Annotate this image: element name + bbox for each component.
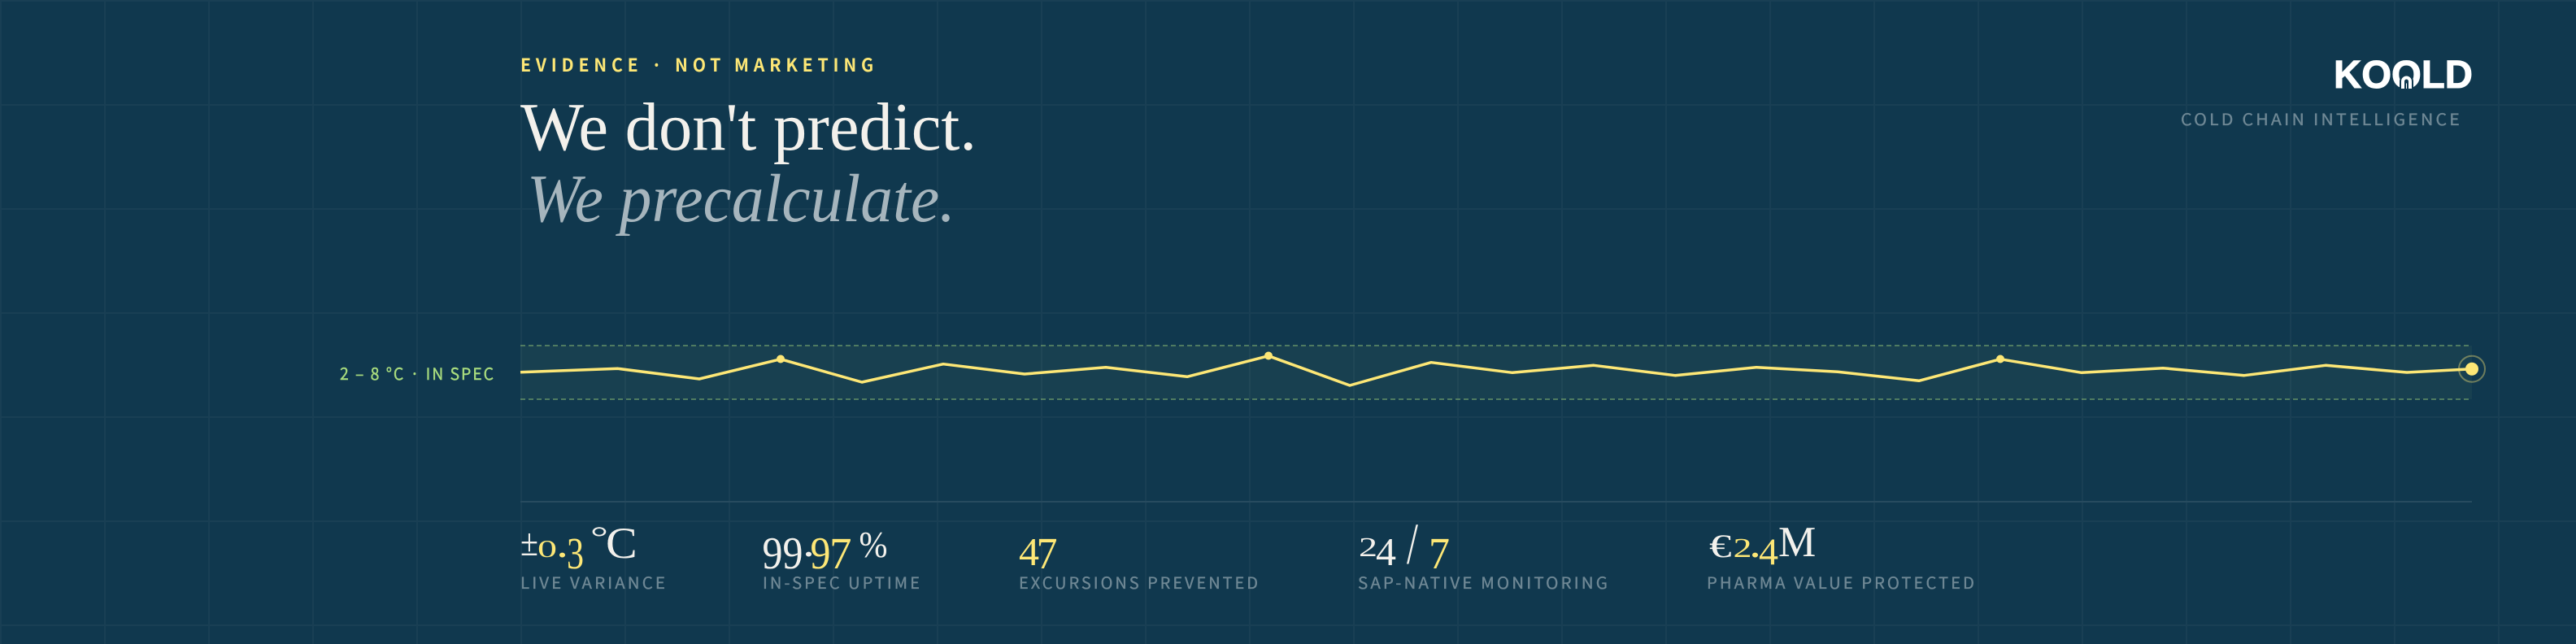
- stat: in-spec uptime: [763, 520, 922, 594]
- stat: live variance: .: [556, 521, 568, 566]
- stat: in-spec uptime: 7: [829, 529, 852, 578]
- stat: in-spec uptime: 9: [782, 529, 803, 579]
- stat: in-spec uptime: 9: [810, 529, 831, 579]
- eyebrow: EVIDENCE · NOT MARKETING: [520, 51, 878, 77]
- stat: live variance: 0: [537, 534, 557, 563]
- stat: sap-native monitoring: 2: [1359, 532, 1377, 563]
- stat: live variance: ±: [520, 521, 538, 564]
- title: We don't predict.: [520, 89, 977, 165]
- stat: sap-native monitoring: 4: [1376, 529, 1396, 574]
- divider: [520, 501, 2472, 503]
- stat: excursions prevented: [1019, 529, 1260, 594]
- stat: live variance: C: [606, 520, 637, 568]
- stat: pharma value protected: [1707, 519, 1977, 594]
- range label: 2 – 8 °C · IN SPEC: [340, 361, 495, 385]
- stat: live variance: 3: [567, 529, 584, 578]
- stat: sap-native monitoring: [1358, 512, 1610, 594]
- stat: pharma value protected: €: [1709, 529, 1732, 564]
- stat: live variance: °: [590, 521, 608, 555]
- logo: KOOLD: KOOLD: [2334, 54, 2473, 97]
- stat: live variance: LIVE VARIANCE: [520, 570, 668, 594]
- title: [520, 89, 977, 237]
- stat: pharma value protected: 4: [1759, 531, 1778, 573]
- title: We precalculate.: [527, 161, 955, 237]
- stat: pharma value protected: M: [1778, 519, 1816, 566]
- logo tagline: COLD CHAIN INTELLIGENCE: [2181, 107, 2462, 130]
- stat: excursions prevented: EXCURSIONS PREVENTED: [1019, 570, 1260, 594]
- stat: sap-native monitoring: SAP-NATIVE MONITORING: [1358, 570, 1610, 594]
- stat: in-spec uptime: IN-SPEC UPTIME: [763, 570, 922, 594]
- stat: in-spec uptime: %: [859, 524, 887, 565]
- stat: pharma value protected: .: [1749, 521, 1761, 566]
- stat: sap-native monitoring: 7: [1429, 529, 1450, 578]
- stat: live variance: [520, 520, 668, 594]
- stat: pharma value protected: PHARMA VALUE PROTECTED: [1707, 570, 1977, 594]
- stat: excursions prevented: 4: [1019, 529, 1039, 574]
- stat: excursions prevented: 7: [1036, 529, 1058, 578]
- stat: in-spec uptime: .: [803, 520, 815, 565]
- stat: pharma value protected: 2: [1734, 533, 1751, 564]
- stat: sap-native monitoring: /: [1407, 512, 1419, 577]
- chart: temperature line in spec band: [520, 346, 2485, 399]
- stat: in-spec uptime: 9: [763, 529, 783, 579]
